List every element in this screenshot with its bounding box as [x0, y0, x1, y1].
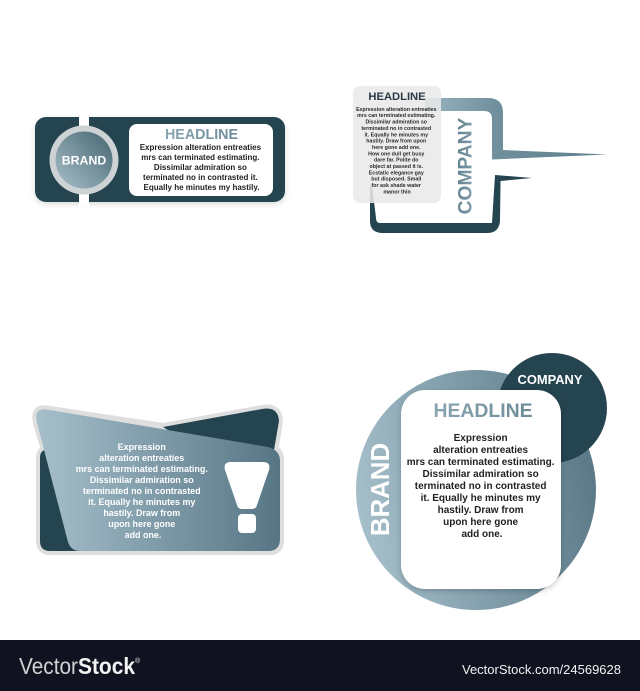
footer url: VectorStock.com/24569628 [462, 662, 621, 677]
body text: terminated no in contrasted [415, 481, 546, 492]
body text: Expression [454, 433, 508, 444]
body text: hastily. Draw from upon [366, 138, 426, 144]
body text: How one dull get busy [368, 151, 424, 157]
white text card [129, 124, 273, 196]
icon: exclamation mark [225, 462, 269, 533]
body text: it. Equally he minutes my [421, 493, 541, 504]
body text: Expression alteration entreaties [140, 143, 262, 152]
headline: HEADLINE [433, 400, 533, 422]
body text: add one. [125, 530, 161, 540]
dark frame with tail [370, 175, 532, 233]
body text: alteration entreaties [99, 453, 184, 463]
brand label: BRAND [62, 154, 106, 168]
body text: manor thin [383, 189, 411, 195]
panel: brand bar [35, 112, 285, 207]
body text: Dissimilar admiration so [365, 120, 428, 126]
dark company circle [497, 353, 607, 463]
body text: upon here gone [108, 519, 175, 529]
company vertical label: COMPANY [456, 117, 476, 214]
headline: HEADLINE [165, 127, 238, 143]
body text: Expression [118, 442, 166, 452]
body text: mrs can terminated estimating. [407, 457, 555, 468]
body text: Equally he minutes my hastily. [144, 183, 259, 192]
brand circle [50, 126, 118, 194]
body text: terminated no in contrasted [83, 486, 201, 496]
panel: speech frame [353, 86, 607, 233]
body text: for ask shade water [372, 183, 421, 189]
gradient front shape [36, 409, 280, 551]
translucent text card [353, 86, 441, 203]
body text: it. Equally he minutes my [364, 132, 428, 138]
body text: Dissimilar admiration so [90, 475, 194, 485]
panel: alert card [36, 408, 280, 551]
body text: hastily. Draw from [103, 508, 180, 518]
body text: hastily. Draw from [438, 505, 524, 516]
body text: but disposed. Small [371, 176, 422, 182]
body text: here gone add one. [372, 145, 421, 151]
body text: Dissimilar admiration so [154, 163, 247, 172]
body text: object at passed it is. [369, 164, 424, 170]
body text: upon here gone [443, 517, 519, 528]
body text: it. Equally he minutes my [88, 497, 195, 507]
teal frame with tail [425, 98, 607, 160]
body text: mrs can terminated estimating. [76, 464, 208, 474]
footer logo: VectorStock [19, 653, 141, 679]
body text: terminated no in contrasted [361, 126, 431, 132]
body text: dare far. Polite do [374, 158, 419, 164]
body text: Expression alteration entreaties [356, 107, 436, 113]
body text: alteration entreaties [433, 445, 529, 456]
body text: add one. [461, 529, 503, 540]
footer bar [0, 640, 640, 691]
brand vertical label: BRAND [367, 443, 395, 536]
body text: Dissimilar admiration so [423, 469, 539, 480]
body text: terminated no in contrasted it. [143, 173, 258, 182]
dark back shape [40, 408, 279, 551]
card outline [36, 408, 280, 551]
company label: COMPANY [518, 372, 583, 387]
footer logo: ® [135, 657, 141, 665]
body text: mrs can terminated estimating. [357, 113, 436, 119]
body text: mrs can terminated estimating. [141, 153, 260, 162]
body text: Ecstatic elegance gay [369, 170, 424, 176]
headline: HEADLINE [368, 91, 426, 103]
brand bar body [35, 112, 285, 207]
big gradient circle [356, 370, 596, 610]
panel: circle card [356, 353, 607, 610]
white text card [401, 390, 561, 591]
